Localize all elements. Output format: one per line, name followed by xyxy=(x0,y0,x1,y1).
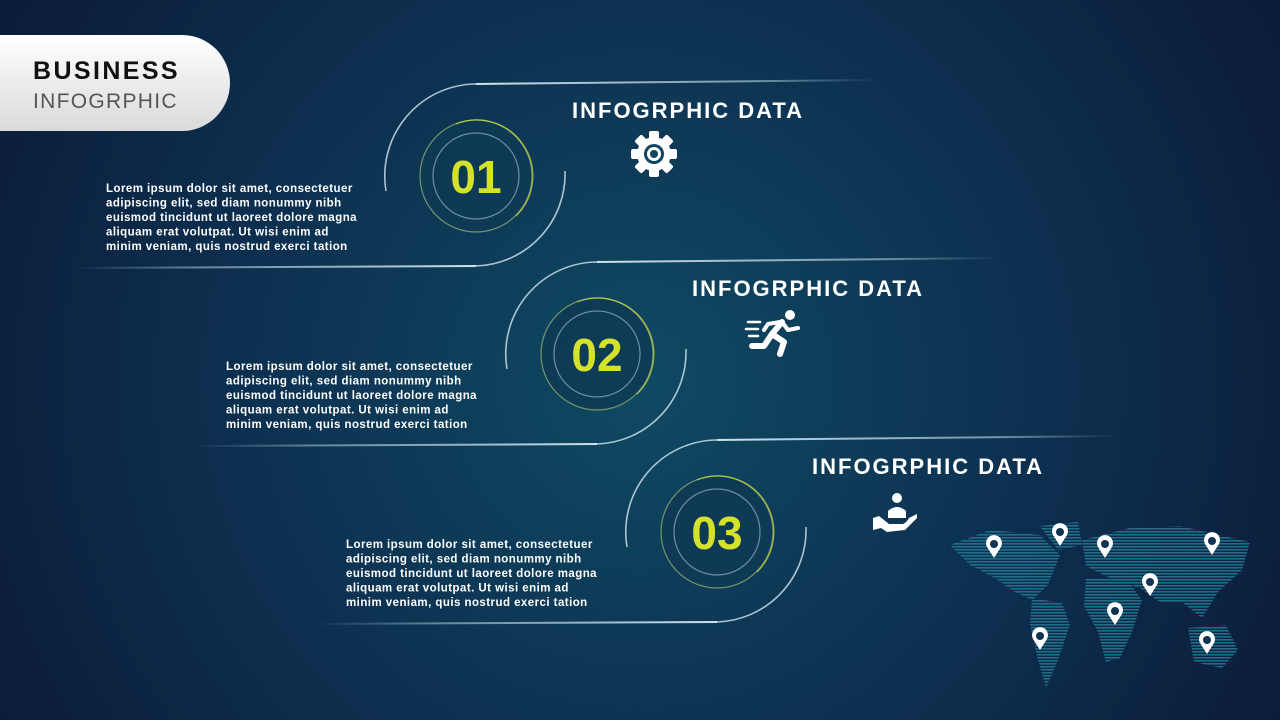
text block 1: adipiscing elit, sed diam nonummy nibh xyxy=(106,198,342,210)
text block 1: aliquam erat volutpat. Ut wisi enim ad xyxy=(106,226,329,238)
text block 2: adipiscing elit, sed diam nonummy nibh xyxy=(226,376,462,388)
step 1 xyxy=(76,80,876,268)
text block 3: adipiscing elit, sed diam nonummy nibh xyxy=(346,554,582,566)
world map xyxy=(950,522,1250,688)
text block 3: minim veniam, quis nostrud exerci tation xyxy=(346,597,588,609)
text block 3: Lorem ipsum dolor sit amet, consectetuer xyxy=(346,539,593,551)
map pins xyxy=(986,523,1220,654)
title badge: INFOGRPHIC xyxy=(33,90,178,113)
text block 3: euismod tincidunt ut laoreet dolore magna xyxy=(346,568,597,580)
icon: hand with person xyxy=(873,493,917,532)
text block 3: aliquam erat volutpat. Ut wisi enim ad xyxy=(346,582,569,594)
icon: gear xyxy=(631,131,677,177)
step 1: 01 xyxy=(450,151,502,203)
text block 2: minim veniam, quis nostrud exerci tation xyxy=(226,419,468,431)
text block 1: Lorem ipsum dolor sit amet, consectetuer xyxy=(106,183,353,195)
step 2: INFOGRPHIC DATA xyxy=(692,276,924,301)
step 1: INFOGRPHIC DATA xyxy=(572,98,804,123)
step 3: 03 xyxy=(691,507,743,559)
step 2: 02 xyxy=(571,329,623,381)
step 3: INFOGRPHIC DATA xyxy=(812,454,1044,479)
text block 1: minim veniam, quis nostrud exerci tation xyxy=(106,241,348,253)
step 3 xyxy=(317,436,1117,624)
text block 1: euismod tincidunt ut laoreet dolore magna xyxy=(106,212,357,224)
icon: runner xyxy=(746,310,798,354)
title badge: BUSINESS xyxy=(33,57,180,85)
text block 2: euismod tincidunt ut laoreet dolore magna xyxy=(226,390,477,402)
text block 2: Lorem ipsum dolor sit amet, consectetuer xyxy=(226,361,473,373)
text block 2: aliquam erat volutpat. Ut wisi enim ad xyxy=(226,404,449,416)
step 2 xyxy=(197,258,997,446)
title badge xyxy=(0,35,230,131)
